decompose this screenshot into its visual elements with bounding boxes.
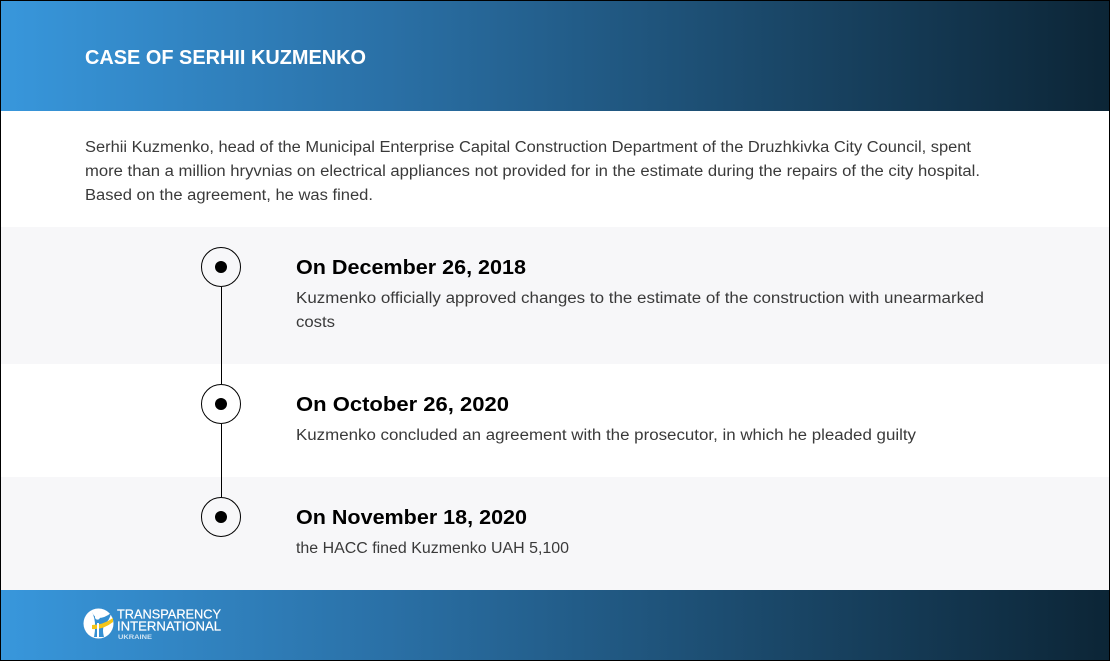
title: CASE OF SERHII KUZMENKO: [85, 46, 366, 69]
timeline event 1: [202, 248, 984, 331]
intro text block: Based on the agreement, he was fined.: [85, 187, 373, 204]
logo wordmark: UKRAINE: [118, 634, 153, 641]
icon: timeline marker 2: [202, 384, 240, 424]
timeline connector: [220, 287, 222, 497]
intro text block: Serhii Kuzmenko, head of the Municipal Enterprise Capital Construction Department of the Druzhkivka City Council, spent: [85, 139, 972, 156]
intro text block: [85, 139, 980, 204]
icon: globe figure: [84, 608, 114, 638]
panel: row backgrounds: [1, 227, 1109, 590]
footer banner: [0, 590, 1110, 661]
logo wordmark: INTERNATIONAL: [117, 620, 221, 634]
date heading 1: On December 26, 2018: [296, 256, 526, 279]
event description 3: the HACC fined Kuzmenko UAH 5,100: [296, 540, 569, 557]
icon: timeline marker 3: [202, 498, 240, 536]
timeline event 3: [202, 498, 569, 557]
intro text block: more than a million hryvnias on electrical appliances not provided for in the estimate during the repairs of the city hospital.: [85, 163, 980, 180]
icon: timeline marker 1: [202, 248, 240, 286]
logo wordmark: [117, 608, 222, 641]
event description 1: [296, 290, 984, 331]
timeline event 2: [202, 384, 916, 444]
date heading 3: On November 18, 2020: [296, 506, 527, 529]
logo: [84, 608, 222, 641]
header banner: [0, 0, 1110, 111]
event description 1: costs: [296, 314, 335, 331]
event description 1: Kuzmenko officially approved changes to the estimate of the construction with unearmarked: [296, 290, 984, 307]
event description 2: Kuzmenko concluded an agreement with the prosecutor, in which he pleaded guilty: [296, 427, 916, 444]
logo wordmark: TRANSPARENCY: [117, 608, 222, 622]
date heading 2: On October 26, 2020: [296, 393, 509, 416]
